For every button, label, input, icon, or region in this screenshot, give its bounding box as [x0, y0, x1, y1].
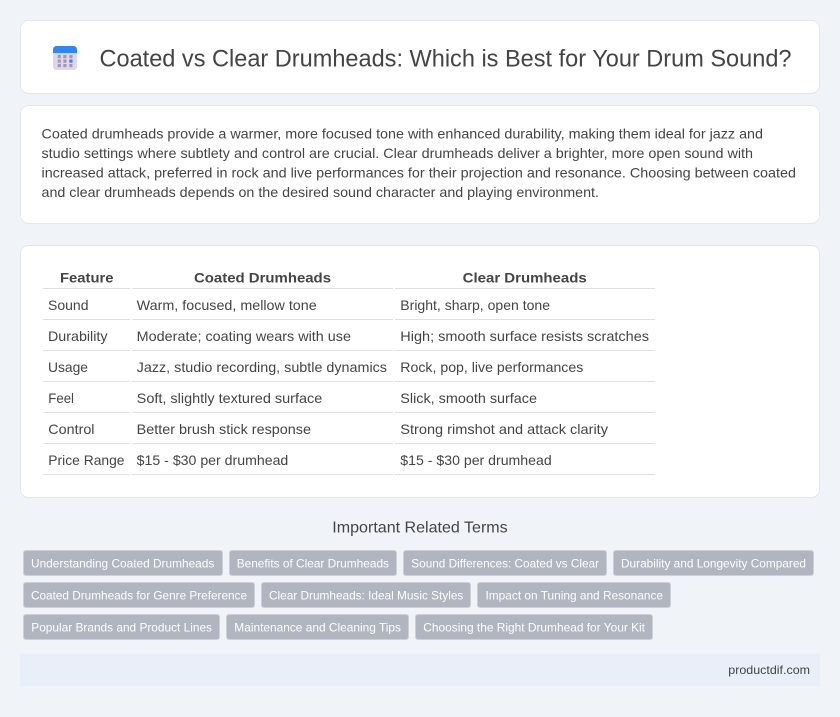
- table header: Coated Drumheads: [194, 270, 331, 286]
- row: Feel: [48, 390, 537, 406]
- row: Sound: [48, 297, 550, 313]
- row: Feel: Slick, smooth surface: [400, 390, 537, 406]
- row: Price Range: [48, 452, 552, 468]
- row: Control: Strong rimshot and attack clarity: [400, 421, 608, 437]
- tag: [416, 614, 652, 640]
- tag: [262, 582, 470, 608]
- row: Control: [48, 421, 608, 437]
- tag: Maintenance and Cleaning Tips: [234, 620, 401, 634]
- paragraph text: and clear drumheads depends on the desired sound character and playing environment.: [42, 184, 599, 200]
- row: Control: Better brush stick response: [137, 421, 311, 437]
- tag: [24, 582, 254, 608]
- tag: Sound Differences: Coated vs Clear: [411, 556, 599, 570]
- row: Sound: Warm, focused, mellow tone: [137, 297, 317, 313]
- footer bar: [20, 654, 820, 686]
- tag: [24, 614, 220, 640]
- row: Price Range: Price Range: [48, 452, 125, 468]
- row: Usage: Jazz, studio recording, subtle dynamics: [137, 359, 387, 375]
- row: Durability: High; smooth surface resists scratches: [400, 328, 649, 344]
- related term tags: [24, 550, 814, 640]
- title text: Coated vs Clear Drumheads: Which is Best for Your Drum Sound?: [100, 46, 792, 72]
- tag: Clear Drumheads: Ideal Music Styles: [269, 588, 463, 602]
- tag: Durability and Longevity Compared: [621, 556, 806, 570]
- tag: [614, 550, 814, 576]
- row: Durability: [48, 328, 649, 344]
- row: Feel: Feel: [48, 390, 74, 406]
- tag: Choosing the Right Drumhead for Your Kit: [423, 620, 646, 634]
- tag: [478, 582, 670, 608]
- row: Usage: [48, 359, 583, 375]
- panel: intro paragraph: [20, 106, 820, 224]
- row: Usage: Rock, pop, live performances: [400, 359, 583, 375]
- tag: [226, 614, 408, 640]
- paragraph text: Coated drumheads provide a warmer, more focused tone with enhanced durability, making them ideal for jazz and: [42, 126, 763, 142]
- tag: Popular Brands and Product Lines: [31, 620, 212, 634]
- row: Sound: Sound: [48, 297, 88, 313]
- tag: Understanding Coated Drumheads: [31, 556, 214, 570]
- tag: Impact on Tuning and Resonance: [486, 588, 663, 602]
- tag: [404, 550, 606, 576]
- tag: [24, 550, 222, 576]
- tag: [230, 550, 396, 576]
- icon: calendar: [53, 46, 77, 70]
- row: Durability: Moderate; coating wears with use: [137, 328, 351, 344]
- paragraph text: studio settings where subtlety and control are crucial. Clear drumheads deliver a brighter, more open sound with: [42, 145, 753, 161]
- row: Price Range: $15 - $30 per drumhead: [400, 452, 552, 468]
- table header: [60, 270, 587, 286]
- footer source text: productdif.com: [728, 663, 810, 677]
- row: Feel: Soft, slightly textured surface: [137, 390, 323, 406]
- paragraph text: [42, 126, 796, 200]
- row: Sound: Bright, sharp, open tone: [400, 297, 550, 313]
- heading: related terms: Important Related Terms: [332, 520, 508, 537]
- tag: Benefits of Clear Drumheads: [237, 556, 389, 570]
- row: Usage: Usage: [48, 359, 88, 375]
- row: Durability: Durability: [48, 328, 108, 344]
- table header: Feature: [60, 270, 114, 286]
- row: Control: Control: [48, 421, 94, 437]
- panel: title: [20, 20, 820, 94]
- table header: Clear Drumheads: [463, 270, 587, 286]
- paragraph text: increased attack, preferred in rock and live performances for their projection and resonance. Choosing between coated: [42, 164, 796, 180]
- panel: comparison table: [20, 246, 820, 498]
- row: Price Range: $15 - $30 per drumhead: [137, 452, 288, 468]
- tag: Coated Drumheads for Genre Preference: [31, 588, 247, 602]
